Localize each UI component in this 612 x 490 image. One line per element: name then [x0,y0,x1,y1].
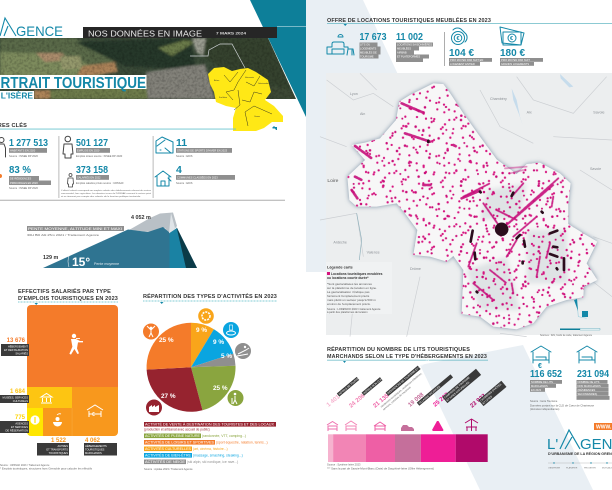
rotated labels: bed categories: RÉSIDENCES DE TOURISME ET ASSIMILÉS [386,356,430,395]
stat: résidences principales: 83 % [9,164,32,176]
icon: ski [235,343,251,359]
map: scattered rental dots [348,85,596,328]
icon: sofa and lamp [327,34,354,55]
label: 1 522 [37,438,69,456]
stat: emplois privés: SALARIÉS EN 2022 [77,174,101,180]
map: dots of tourist rentals over Isère [320,73,612,368]
stat: lits marchands: 116 652 [530,369,562,380]
heading: répartition des types d'activités: RÉPARTITION DES TYPES D'ACTIVITÉS EN 2023 [143,292,277,300]
stat: lits non marchands: NOMBRE DE LITS [578,380,600,384]
stat: 104 € [449,28,492,66]
chart: stacked bar of beds [328,434,488,462]
map north arrow and scale: Sources : IGN, fonds de carte, traitement Agence [540,334,593,337]
map: relief shading [467,183,568,310]
heading: offre de locations: OFFRE DE LOCATIONS TOURISTIQUES MEUBLÉES EN 2023 [327,16,491,24]
rotated labels: bed categories: CHAMBRES D'HÔTES [478,381,502,402]
chart: activity pie: 9 % [196,327,207,334]
stat: 11 002: 11 002 [396,32,423,43]
chart: activity pie: 27 % [161,393,176,400]
map: base roads and water: Valence [367,250,380,254]
stat: 11 002: MEUBLÉES [397,46,411,51]
chart: activity pie: 25 % [159,337,174,344]
heading: répartition des lits touristiques: RÉPARTITION DU NOMBRE DE LITS TOURISTIQUES [327,345,470,353]
stat: 180 €: € [510,36,513,42]
label: 775: AGENCES [15,422,28,426]
map: base roads and water [320,73,612,337]
map legend: Source : LODEWOO 2023 / traitement Agence [327,307,381,311]
heading: répartition des lits touristiques: MARCHANDS SELON LE TYPE D'HÉBERGEMENTS EN 2023 [327,352,487,360]
divider [443,32,446,66]
stat: habitants: Source : INSEE RP 2020 [9,154,38,158]
source: lits: Source : Isère Tourisme [530,399,558,403]
chart: mountain altitude: 129 m [43,255,58,261]
stat: stations de ski: Source : EDIS [176,154,193,158]
source: treemap: Source : URSSAF 2023 / Traitement Agence [0,464,50,467]
logo: L'Agence top left: ME DE LA RÉGION GRENOBLOISE [0,38,62,44]
stat: lits marchands: MARCHANDS [531,384,548,388]
legend: activity types: (production et artisanat avec accueil de public) [144,428,210,432]
divider [0,199,285,202]
legend: activity types: ACTIVITÉS DE BIEN-ÊTRE [145,452,191,458]
icon: waiter [69,334,83,355]
stat: lits non marchands [576,346,610,400]
stat: habitants [0,137,48,158]
legend: activity types: ACTIVITÉ DE VENTE À DESTINATION DES TOURISTES ET DES LOCAUX [145,422,275,427]
rotated labels: bed categories: 25 287 [432,392,451,409]
label: 13 676: HÉBERGEMENT [8,344,28,348]
chart: activity pie: 25 % [213,385,228,392]
map legend: forcément l'emplacement précis [327,294,370,298]
stat: 11 002: ET PLATEFORMES [397,55,420,59]
stat: communes classées [155,164,235,186]
stat: 11 002 [396,32,433,62]
label: 4 062: MARCHANDS [85,451,102,455]
rotated labels: bed categories: 1 401 [326,394,342,409]
stat: habitants: HABITANTS EN 2020 [10,148,36,152]
map legend: La géolocalisation n'indique pas [327,290,370,294]
heading: répartition des types d'activités [143,292,277,304]
stat: lits marchands: NOMBRE DE LITS [531,380,553,384]
map: yellow Isère territories: Sud Isère [219,96,227,99]
chart: mountain altitude: PENTE MOYENNE, ALTITUDE MINI ET MAXI [28,227,122,231]
rotated labels: bed categories: 24 206 [348,393,367,410]
map: territory outline halo [347,83,597,329]
legend: activity types: (sport équestre, natation, tennis...) [216,441,268,445]
divider [58,136,60,198]
heading: effectifs salariés [18,287,118,305]
icon: info [30,415,40,425]
map legend [326,262,392,314]
rotated labels: bed categories [325,356,506,415]
stat: lits marchands: € [538,363,542,370]
stat: stations de ski: 11 [176,137,187,149]
stat: résidences principales [0,164,51,190]
stat: emplois: EMPLOIS EN 2020 [77,148,100,152]
stat: lits non marchands: (RÉSIDENCES [578,387,595,392]
label: 1 684: 1 684 [10,389,26,395]
map: base roads and water: Ain [360,112,365,116]
source: treemap: * Emplois touristiques, structures hors Grenoble pour calculer les effectifs [0,468,93,470]
divider [152,136,154,198]
stat: communes classées: 4 [176,164,182,176]
heading: effectifs salariés: EFFECTIFS SALARIÉS PAR TYPE [18,287,111,295]
map legend: ou locations courte durée* [327,276,369,280]
stat: habitants: 1 277 513 [9,137,48,149]
website button: WWW. [596,424,612,430]
stat: 104 €: LOGEMENT ENTIER [450,62,475,66]
stat: 17 673: TOURISME [360,55,374,59]
stat: emplois privés: Emplois salariés privés source : URSSAF [76,181,124,185]
map legend: Légende carte [327,266,353,270]
stat: lits non marchands: NON MARCHANDS [578,384,601,388]
map: territory fill [347,83,597,329]
map: base roads and water: Drôme [410,267,421,271]
legend: activity types: ACTIVITÉS CULTURELLES [145,446,191,451]
stat: communes classées: COMMUNES CLASSÉES EN 2023 [177,174,218,180]
background: teal corner triangle [250,0,306,117]
icon: museum [41,394,52,403]
source: lits: (données indépendantes) [530,407,560,411]
rotated labels: bed categories: 23 923 [469,393,488,410]
label: 1 522: ET TRANSPORTS [46,448,68,452]
background: light diagonal shapes of the right page [306,0,593,490]
decorative line on teal corner [277,25,306,28]
map legend: *Sont géolocalisées les annonces [327,282,372,286]
rotated labels: bed categories: résidences touristiques, résidences hôtelières, [379,371,423,409]
label: 13 676 [1,338,29,356]
chart: mountain altitude: 30H BD Alti 25m 2021 / Traitement Agence [27,233,100,237]
label: 1 522: TOURISTIQUES [49,451,68,455]
legend: activity types: ACTIVITÉS DE PLEINE NATURE [145,433,200,438]
label: 4 062: 4 062 [85,438,101,444]
source: beds: Source : Système Isère 2023 [327,462,361,466]
label: 13 676: SALARIÉS [15,350,28,356]
chart: mountain altitude: Pente moyenne [94,262,119,266]
chart: activity pie [147,323,236,412]
rotated labels: bed categories: VILLAGES VACANCES [418,384,441,405]
map: yellow Isère territories: Voironnais [245,76,254,79]
logo: L'Agence top left: GENCE [16,23,63,39]
chart: activity pie: 5 % [221,353,232,360]
label: 775: ET SERVICES [11,425,28,429]
map legend: mais plutôt un secteur jusqu'à 500 m [327,298,376,302]
label: 4 062 [84,438,117,456]
stat: 180 € [500,27,543,66]
stat: 17 673: LOGEMENTS [360,47,377,51]
label: 13 676: 13 676 [7,338,26,344]
map: yellow Isère territories: Oisans [254,116,260,118]
logo: L'Agence bottom right: OBSERVER [548,468,561,470]
stat: résidences principales: Source : INSEE RP 2020 [9,186,38,190]
map: yellow Isère territories: Grésivaudan [258,82,269,85]
map: base roads and water: Lyon [350,92,358,96]
label: 1 684 [0,389,29,403]
legend: activity types: (randonnée, VTT, camping...) [202,434,246,438]
map legend: sur la plateforme de location en ligne. [327,286,377,290]
heading: effectifs salariés: D'EMPLOIS TOURISTIQUES EN 2023 [18,296,118,302]
rotated labels: bed categories: ET GÎTES [481,394,493,405]
logo: L'Agence bottom right: L' [547,436,558,453]
source: treemap [0,464,93,470]
aerial photo banner [0,38,300,99]
stat: 180 €: 180 € [500,48,525,59]
note on employment: concurrentiel, hors agriculture. Les données issues de l'URSSAF couvrent le secteur privé [61,192,152,195]
source: lits [530,399,595,411]
chart: mountain altitude [27,212,197,269]
icon: culture [198,308,214,324]
map: saturated dark clusters [428,141,564,292]
stat: 17 673: MEUBLÉS DE [360,50,377,55]
stat: 17 673 [360,32,387,59]
map legend: Locations touristiques meublées [331,272,383,276]
small logo under yellow map [272,126,277,130]
logo: L'Agence bottom right: PLANIFIER [566,466,578,470]
label: 1 684: MUSÉES, SERVICES [3,394,28,400]
icon: spa [223,322,239,338]
icon: accommodation: € [92,412,95,418]
label: 13 676: ET RESTAURATION [4,348,28,352]
title [0,75,146,100]
legend: activity types: (art, cinéma, histoire...) [193,447,228,451]
source: lits: Données portant sur la CLD de Cœur de Chartreuse [530,404,595,408]
stat: emplois: 501 127 [76,137,108,149]
map: base roads and water: Savoie [593,110,604,114]
icon: restaurant [53,414,62,426]
source: beds: *** Sans la part de Savoie-Mont-Blanc (Date) de Dauphiné-Isère (Offre Hébergement) [327,466,434,470]
stat: 17 673: LITS OU [360,43,370,47]
stat: lits marchands: EN 2023 [531,388,542,392]
stat: 11 002: AIRBNB [397,51,407,55]
map: base roads and water: Aix [527,110,532,114]
stat: 104 €: 104 € [449,48,474,59]
stat: 180 €: PRIX MOYEN PAR NUIT [501,58,530,62]
legend: activity types: (massage, smashing, steaking...) [193,454,243,458]
label: 4 062: TOURISTIQUES [85,448,105,452]
label: 775: 775 [15,415,26,421]
icons: accommodation types [327,419,478,431]
label: 775 [0,415,29,433]
map: base roads and water: Loire [327,178,339,184]
label: 1 522: 1 522 [51,438,67,444]
heading: répartition des lits touristiques [327,345,488,363]
stat: 11 002: LOCATIONS SAISONNIÈRES [397,42,432,47]
banner: nos données en image [83,27,277,38]
legend: activity types: (ski alpin, ski nordique, ice rave...) [187,460,238,464]
rotated labels: bed categories: 19 098 [407,392,426,409]
label: 1 684: CULTURELS [13,399,28,403]
rotated labels: bed categories: services, colonies de vacances [382,385,412,411]
map: denser magenta clusters and valleys [352,103,558,300]
chart: mountain altitude: 15° [72,255,90,269]
icon: factory [146,400,162,416]
map: yellow Isère territories: Bièvre [214,79,219,82]
map: base roads and water: Savoie [590,167,601,171]
chart: activity pie: 9 % [213,339,224,346]
rotated labels: bed categories: HÔTELS DE TOURISME [337,373,363,396]
source: beds [327,462,434,470]
rotated labels: bed categories: 21 135 [372,393,391,410]
rotated labels: bed categories: HÔTELS NON CLASSÉS [362,372,388,395]
banner: nos données en image: NOS DONNÉES EN IMAGE [88,28,202,38]
stat: stations de ski [156,137,232,158]
stat: lits marchands [530,346,562,392]
legend: activity types: ACTIVITÉS DE NEIGE [145,459,185,464]
note on employment: L'effectif salarié correspond aux emplois salariés des établissements relevant du secteur [61,189,151,192]
stat: résidences principales: DE RÉSIDENCES [10,175,31,180]
map legend: à partir des plateformes de location [327,310,368,314]
note on employment [61,189,152,198]
chart: treemap of tourism jobs [27,305,118,436]
logo: L'Agence bottom right [547,430,612,470]
rotated labels: bed categories: CAMPINGS DE TOURISME [443,375,471,399]
stat: 104 €: PRIX MOYEN PAR NUIT EN [450,58,483,62]
stat: résidences principales: PRINCIPALES EN 2020 [10,181,38,185]
map: yellow Isère territories [208,67,283,131]
banner: nos données en image: 7 MARS 2024 [216,32,246,36]
legend: activity types: ACTIVITÉS DE LOISIRS ET SPORTIVES [145,440,214,445]
stat: 180 €: GRANDS LOGEMENTS [501,62,529,66]
icon: person arms up [143,324,159,340]
website button [594,423,612,430]
stat: lits non marchands: SECONDAIRES) [578,392,597,396]
map: base roads and water: Ardèche [333,240,347,244]
chart: mountain altitude: 4 052 m [131,215,151,221]
label: 1 522: AUTRES [57,444,68,448]
map: base roads and water: Chambéry [490,97,507,101]
stat: emplois privés: 373 158 [76,164,108,176]
map north arrow and scale [540,299,600,337]
icon: hiker [228,390,244,406]
stat: emplois [63,136,123,158]
logo: L'Agence bottom right: PROJETER [584,468,596,470]
stat: emplois: Emplois totaux source : INSEE RP 2020 [76,154,123,158]
stat: stations de ski: STATIONS DE SPORTS D'HIVER EN 2023 [177,148,228,152]
logo: L'Agence top left [0,18,63,44]
label: 775: DE RÉSERVATION [6,428,28,432]
stat: emplois privés [68,164,124,187]
stat: 104 €: € [456,36,460,42]
map legend: environ de l'emplacement précis. [327,302,371,306]
stat: 17 673: 17 673 [360,32,387,43]
label: 4 062: HÉBERGEMENTS [85,443,107,448]
rotated labels: bed categories: ET AIRES NATURELLES [445,380,470,402]
legend: activity types: Source : Apidae 2023 / Traitement Agence [144,467,193,471]
note on employment: et ne tiennent pas compte des salariés de la fonction publique territoriale. [61,195,141,198]
stat: communes classées: Source : EDIS [176,181,193,185]
legend: activity types [144,422,276,471]
